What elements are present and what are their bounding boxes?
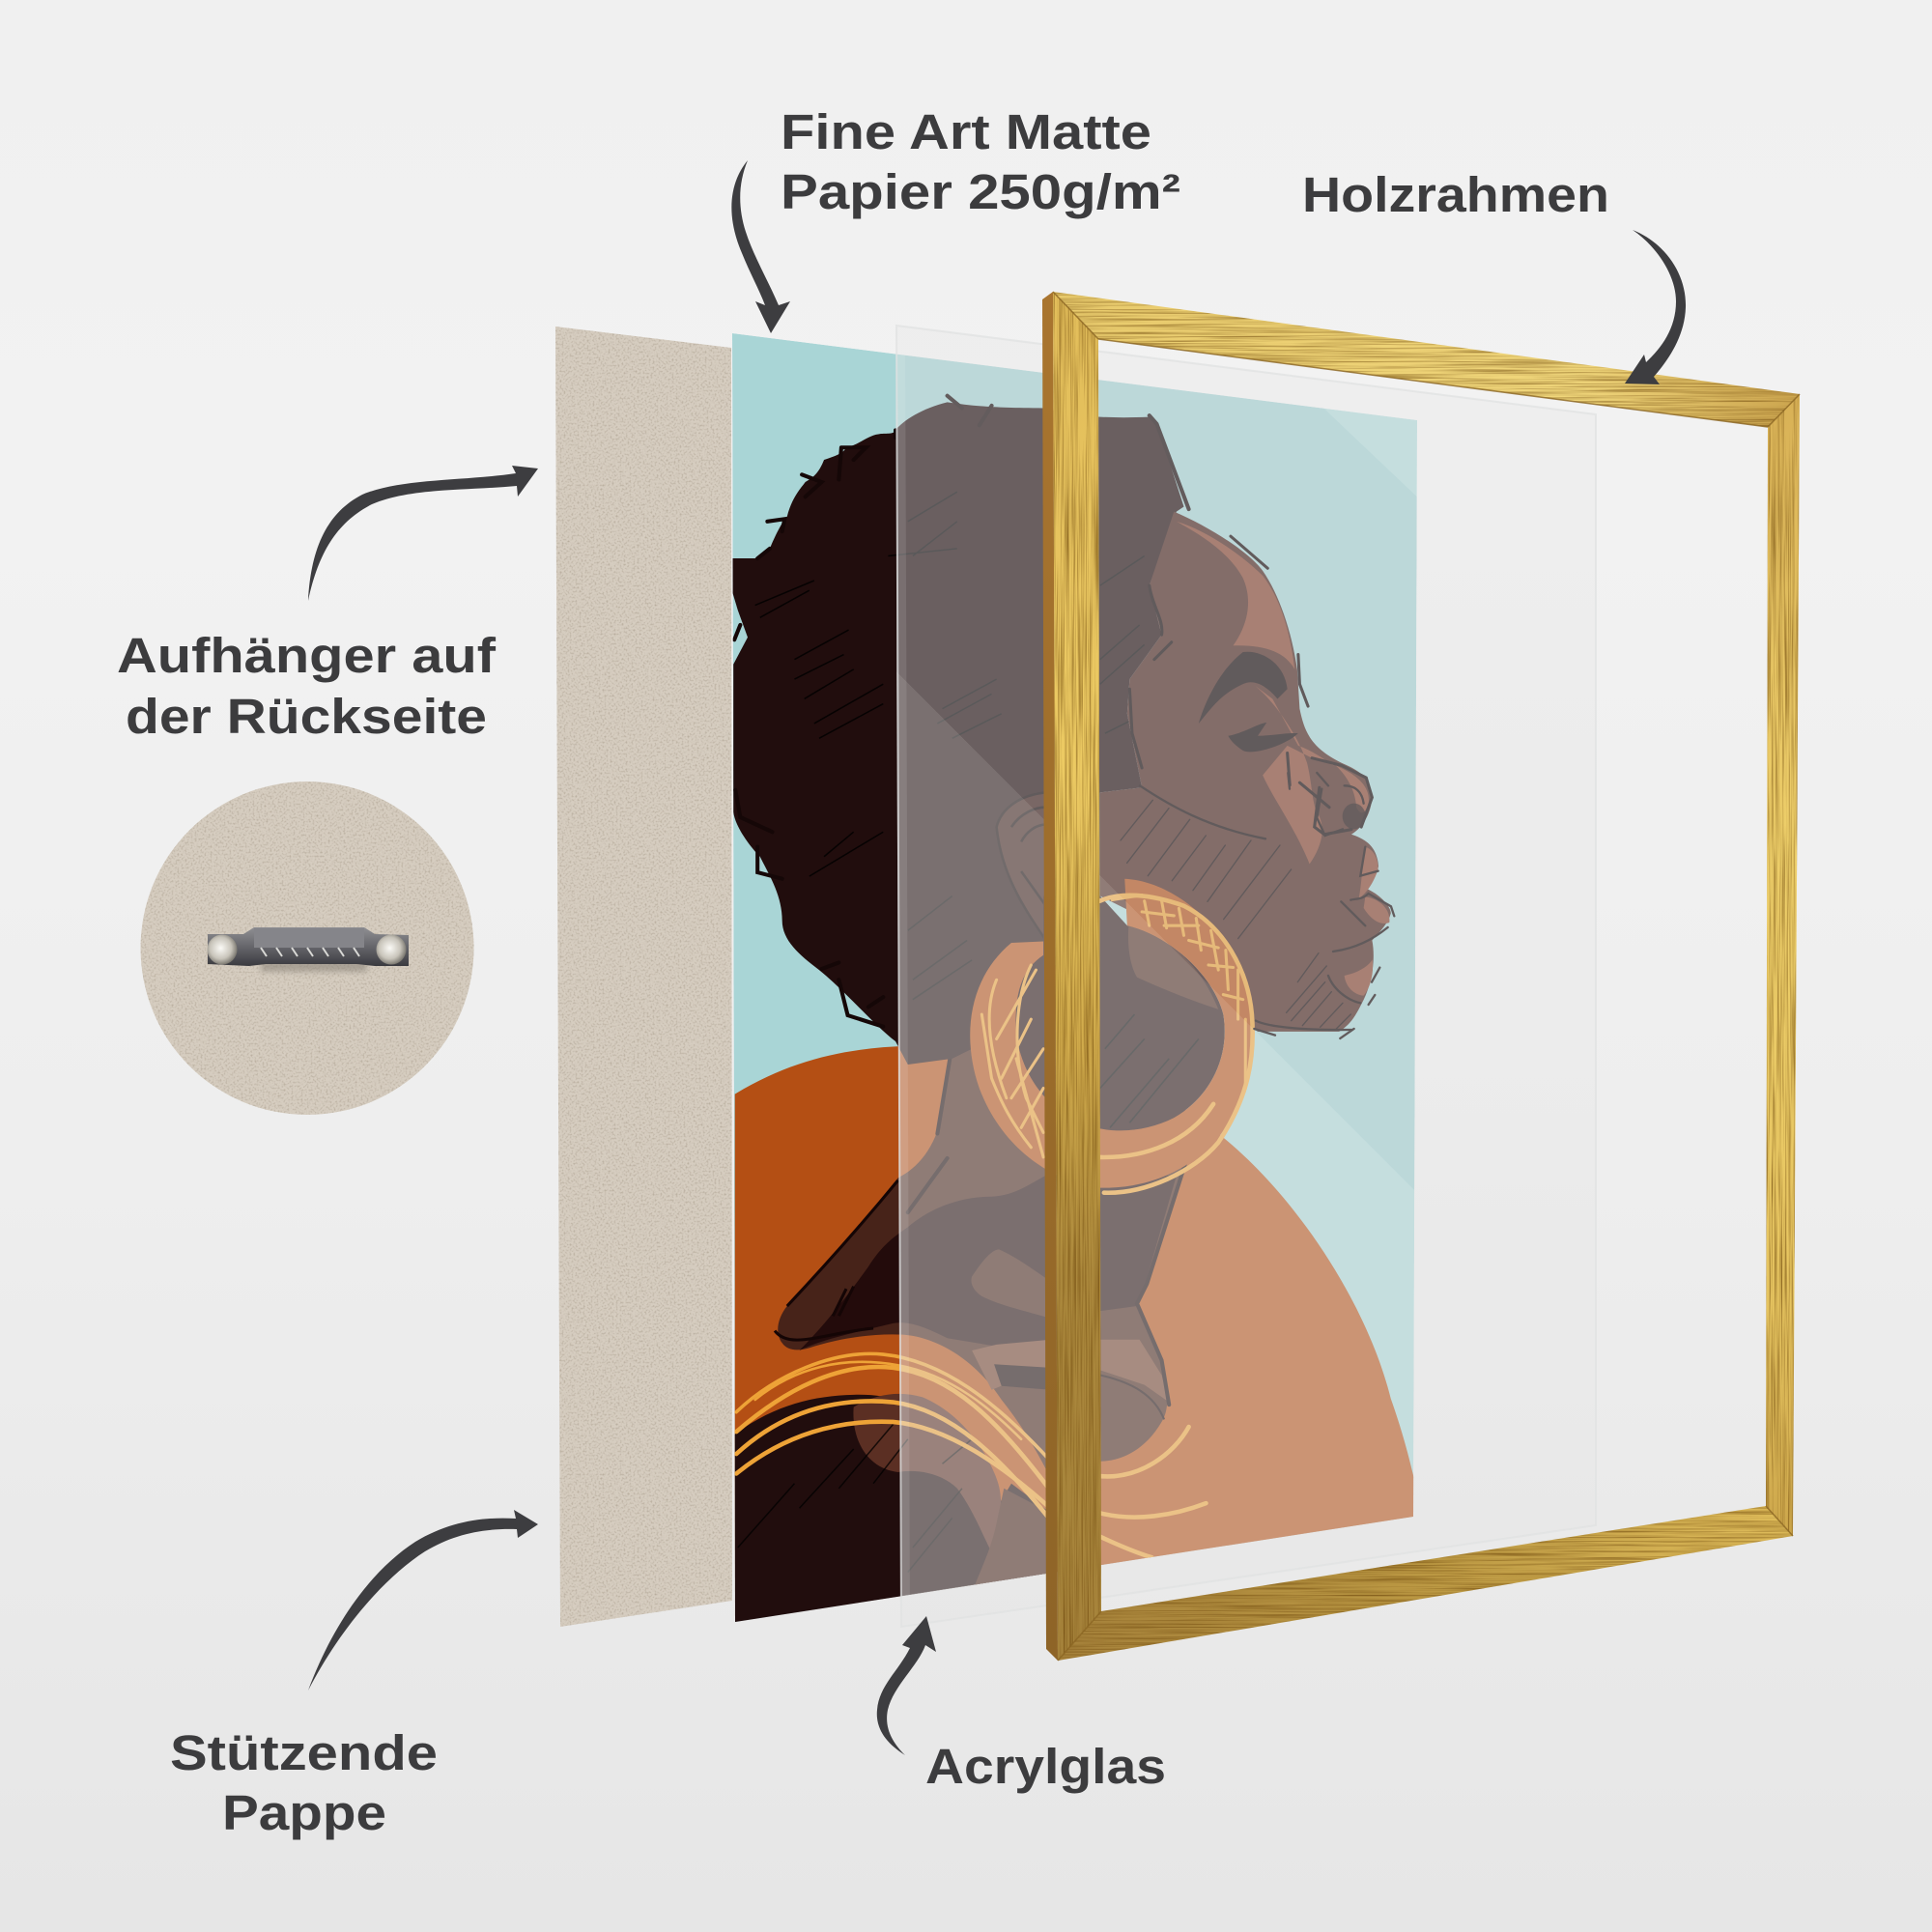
face sketch strokes [1129, 536, 1372, 835]
label: frame: Holzrahmen [1302, 167, 1609, 222]
label: acrylic: Acrylglas [925, 1739, 1166, 1794]
panel: acrylic glass sheet [896, 326, 1596, 1627]
earring [970, 879, 1253, 1193]
acrylic outline [896, 326, 1596, 1627]
poster: fine art print [732, 333, 1417, 1624]
hair sketch strokes [734, 396, 1189, 1027]
frame bottom bar [1058, 1506, 1793, 1661]
label: cardboard: Stützende [170, 1725, 438, 1780]
label: paper [781, 104, 1180, 219]
acrylic tint over background only [896, 326, 1596, 1627]
cardboard circle [141, 781, 473, 1115]
label: cardboard: Pappe [222, 1785, 386, 1840]
panel: gold wooden frame [1042, 292, 1800, 1661]
circle detail: hanger on back [141, 781, 473, 1115]
eyebrow and eye [1199, 652, 1288, 724]
frame mitre lines [1053, 292, 1800, 1661]
face [997, 512, 1391, 1032]
ear [997, 792, 1046, 940]
arrow: to acrylic [877, 1616, 936, 1755]
right rivet [377, 935, 406, 964]
label: cardboard [170, 1725, 438, 1840]
poster background [732, 333, 1417, 1622]
arrow: to hanger side [308, 466, 538, 601]
hair hatching [755, 492, 1145, 1000]
label: hanger [117, 628, 497, 744]
face highlights [1177, 522, 1294, 669]
arrow: to cardboard [308, 1510, 538, 1690]
hanger shadow [261, 960, 367, 972]
frame side face [1042, 292, 1058, 1661]
label: paper: Papier 250g/m² [781, 164, 1180, 219]
sawtooth hanger plate [208, 927, 409, 966]
left rivet [207, 935, 238, 964]
frame right bar [1766, 394, 1800, 1536]
hair [732, 396, 1189, 1065]
arrow: to frame [1625, 230, 1686, 384]
label: hanger: Aufhänger auf [117, 628, 497, 683]
figure body [735, 1015, 1189, 1624]
orange circle [735, 1045, 1415, 1622]
hanger teeth [261, 948, 359, 956]
lower face details [1111, 773, 1394, 1038]
panel: supporting cardboard [555, 327, 732, 1627]
earring inner shadow [1016, 896, 1225, 1130]
acrylic tint over poster [896, 355, 1417, 1596]
label: paper: Fine Art Matte [781, 104, 1151, 159]
hanger bent band [254, 928, 364, 948]
earring lines [1100, 895, 1253, 1193]
arrow: to poster [731, 160, 790, 333]
frame left bar [1053, 292, 1101, 1661]
necklace lines [736, 1353, 1206, 1557]
frame top bar [1053, 292, 1800, 427]
label: hanger: der Rückseite [126, 689, 487, 744]
